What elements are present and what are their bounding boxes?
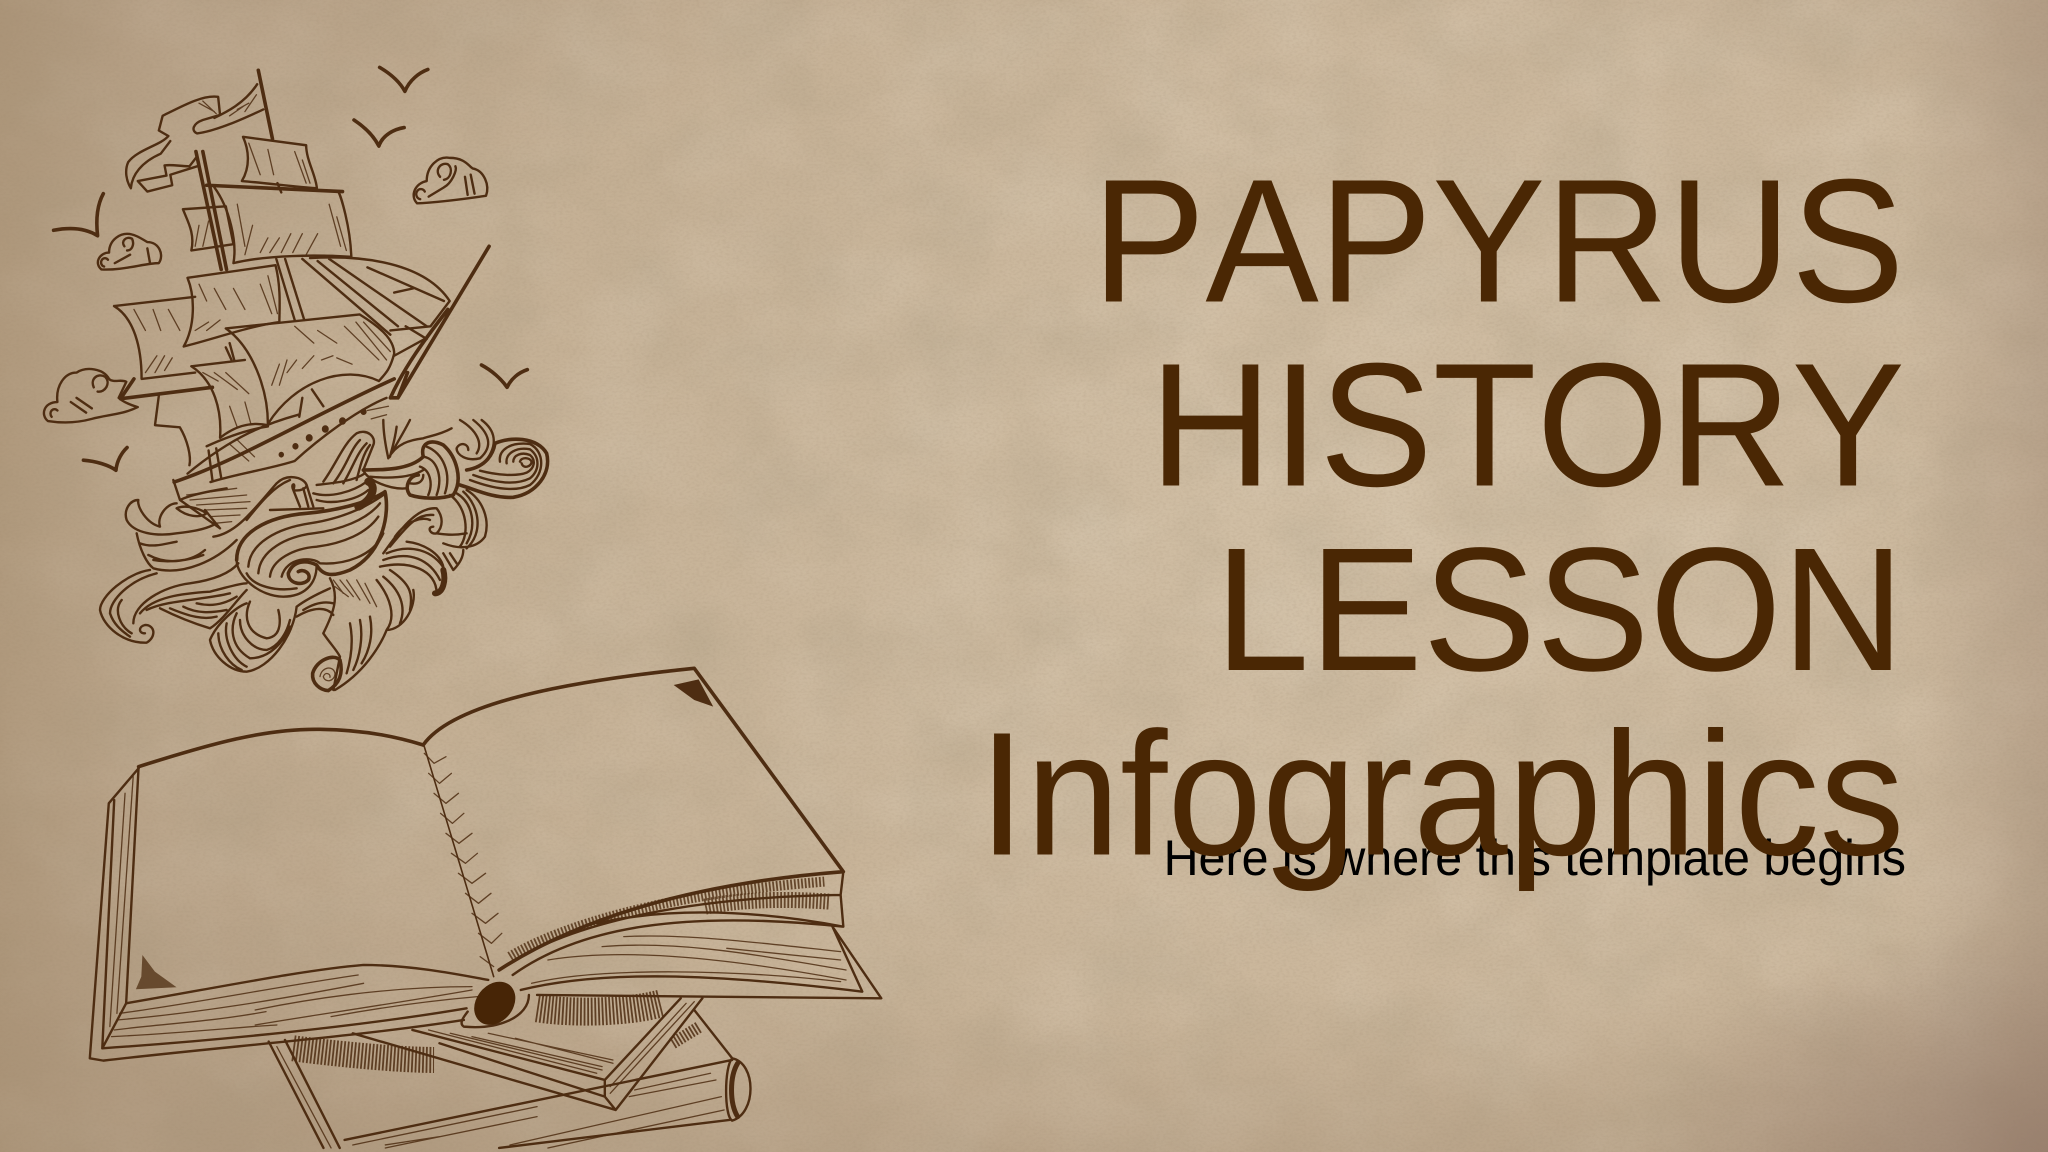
right page layers	[499, 872, 843, 975]
sails	[114, 137, 394, 465]
illustration: sailing ship	[44, 67, 527, 482]
page edge hatching	[510, 882, 824, 957]
title: HISTORY	[1149, 326, 1905, 523]
gutter hatching	[424, 747, 494, 977]
illustration: stack of open and closed books	[90, 668, 881, 1148]
book pages outline	[139, 668, 843, 970]
title	[978, 142, 1905, 892]
title: PAPYRUS	[1092, 142, 1904, 339]
page corner smudges	[674, 679, 713, 707]
masts	[196, 152, 323, 480]
under-book hatching	[293, 1003, 700, 1060]
central swirl knot	[363, 420, 494, 498]
right spiral	[460, 439, 548, 497]
rigging and bowsprit	[302, 246, 489, 398]
illustration: swirling waves	[100, 420, 548, 691]
left curl	[126, 500, 237, 571]
icon: pennant flags	[126, 70, 272, 192]
lower petal	[210, 588, 333, 672]
spine binding	[462, 995, 529, 1027]
left frond above big spiral	[213, 432, 374, 537]
right curl and fronds	[383, 490, 487, 570]
title: Infographics	[978, 695, 1904, 892]
stern of ship	[173, 480, 250, 528]
big main spiral	[237, 492, 386, 597]
bottom closed book	[269, 1010, 750, 1148]
title: LESSON	[1215, 510, 1904, 708]
sail hatching	[134, 143, 390, 427]
icon: clouds	[44, 158, 487, 422]
open book	[90, 668, 881, 1061]
hull	[174, 379, 394, 482]
middle closed book	[353, 998, 702, 1110]
icon: birds	[54, 67, 527, 470]
main lower fan and roll	[313, 542, 445, 691]
lower left fan	[100, 563, 247, 643]
subtitle: Here is where this template begins	[1164, 831, 1906, 886]
left cover	[90, 768, 467, 1061]
